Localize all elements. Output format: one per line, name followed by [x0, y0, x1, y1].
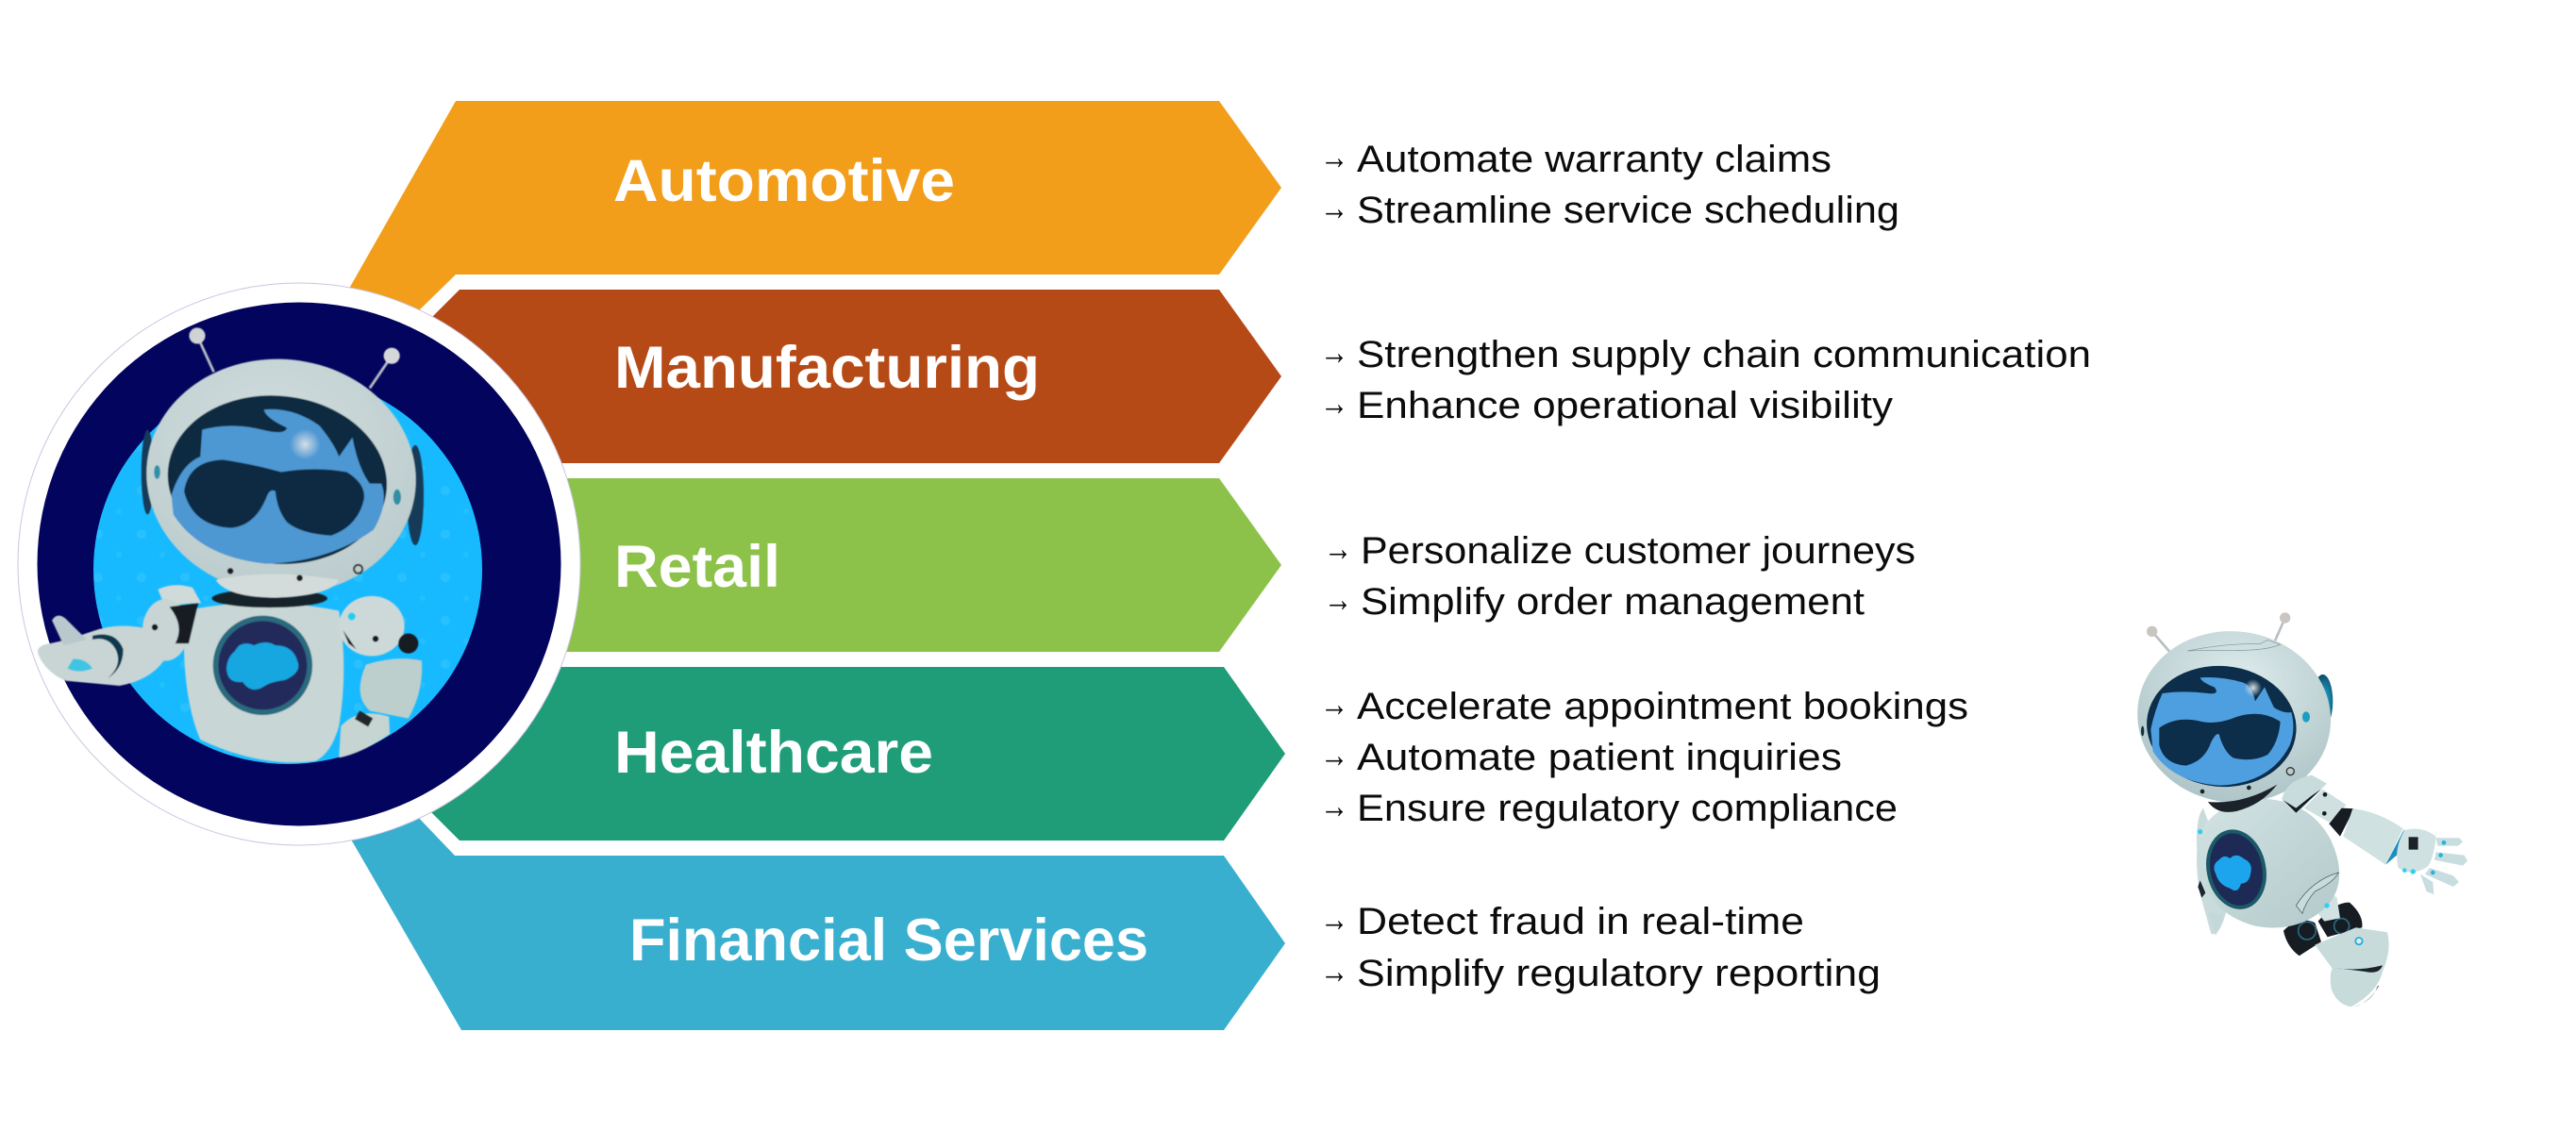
use cases: Retail: → — [1324, 529, 1352, 569]
use cases: Healthcare — [1320, 685, 1968, 829]
use cases: Manufacturing: Strengthen supply chain communication — [1357, 334, 2091, 375]
use cases: Healthcare: Accelerate appointment bookings — [1357, 686, 1968, 727]
chevron: Automotive — [342, 101, 1281, 314]
icon: robot waving, salesforce cloud on chest — [38, 327, 427, 762]
icon: flying robot — [2126, 612, 2467, 1007]
use cases: Manufacturing: Enhance operational visibility — [1357, 385, 1893, 426]
use cases: Financial Services: Detect fraud in real-time — [1357, 901, 1804, 942]
use cases: Healthcare: Ensure regulatory compliance — [1357, 788, 1898, 829]
label: Automotive: Automotive — [613, 148, 955, 214]
use cases: Financial Services: → — [1320, 952, 1348, 991]
use cases: Retail: → — [1324, 580, 1352, 620]
chevron: Financial Services — [340, 814, 1285, 1030]
chevron: Healthcare — [406, 667, 1285, 841]
use cases: Retail: Personalize customer journeys — [1361, 530, 1915, 572]
use cases: Automotive — [1320, 138, 1899, 231]
use cases: Healthcare: → — [1320, 787, 1348, 826]
use cases: Healthcare: → — [1320, 736, 1348, 775]
use cases: Automotive: Automate warranty claims — [1357, 139, 1832, 180]
use cases: Healthcare: → — [1320, 685, 1348, 724]
use cases: Automotive: → — [1320, 189, 1348, 228]
label: Healthcare: Healthcare — [614, 720, 933, 786]
label: Financial Services: Financial Services — [629, 907, 1148, 974]
label: Manufacturing: Manufacturing — [614, 335, 1040, 401]
use cases: Financial Services: Simplify regulatory reporting — [1357, 953, 1881, 994]
use cases: Automotive: → — [1320, 138, 1348, 177]
use cases: Manufacturing: → — [1320, 384, 1348, 424]
use cases: Automotive: Streamline service scheduling — [1357, 190, 1899, 231]
chevron: Retail — [472, 478, 1281, 652]
use cases: Healthcare: Automate patient inquiries — [1357, 737, 1842, 778]
use cases: Financial Services — [1320, 900, 1881, 994]
label: Retail: Retail — [614, 534, 780, 600]
use cases: Manufacturing — [1320, 333, 2091, 426]
use cases: Retail — [1324, 529, 1915, 623]
use cases: Financial Services: → — [1320, 900, 1348, 940]
use cases: Retail: Simplify order management — [1361, 581, 1865, 623]
hero badge: circular robot portrait — [18, 283, 580, 845]
use cases: Manufacturing: → — [1320, 333, 1348, 373]
chevron: Manufacturing — [406, 290, 1281, 463]
